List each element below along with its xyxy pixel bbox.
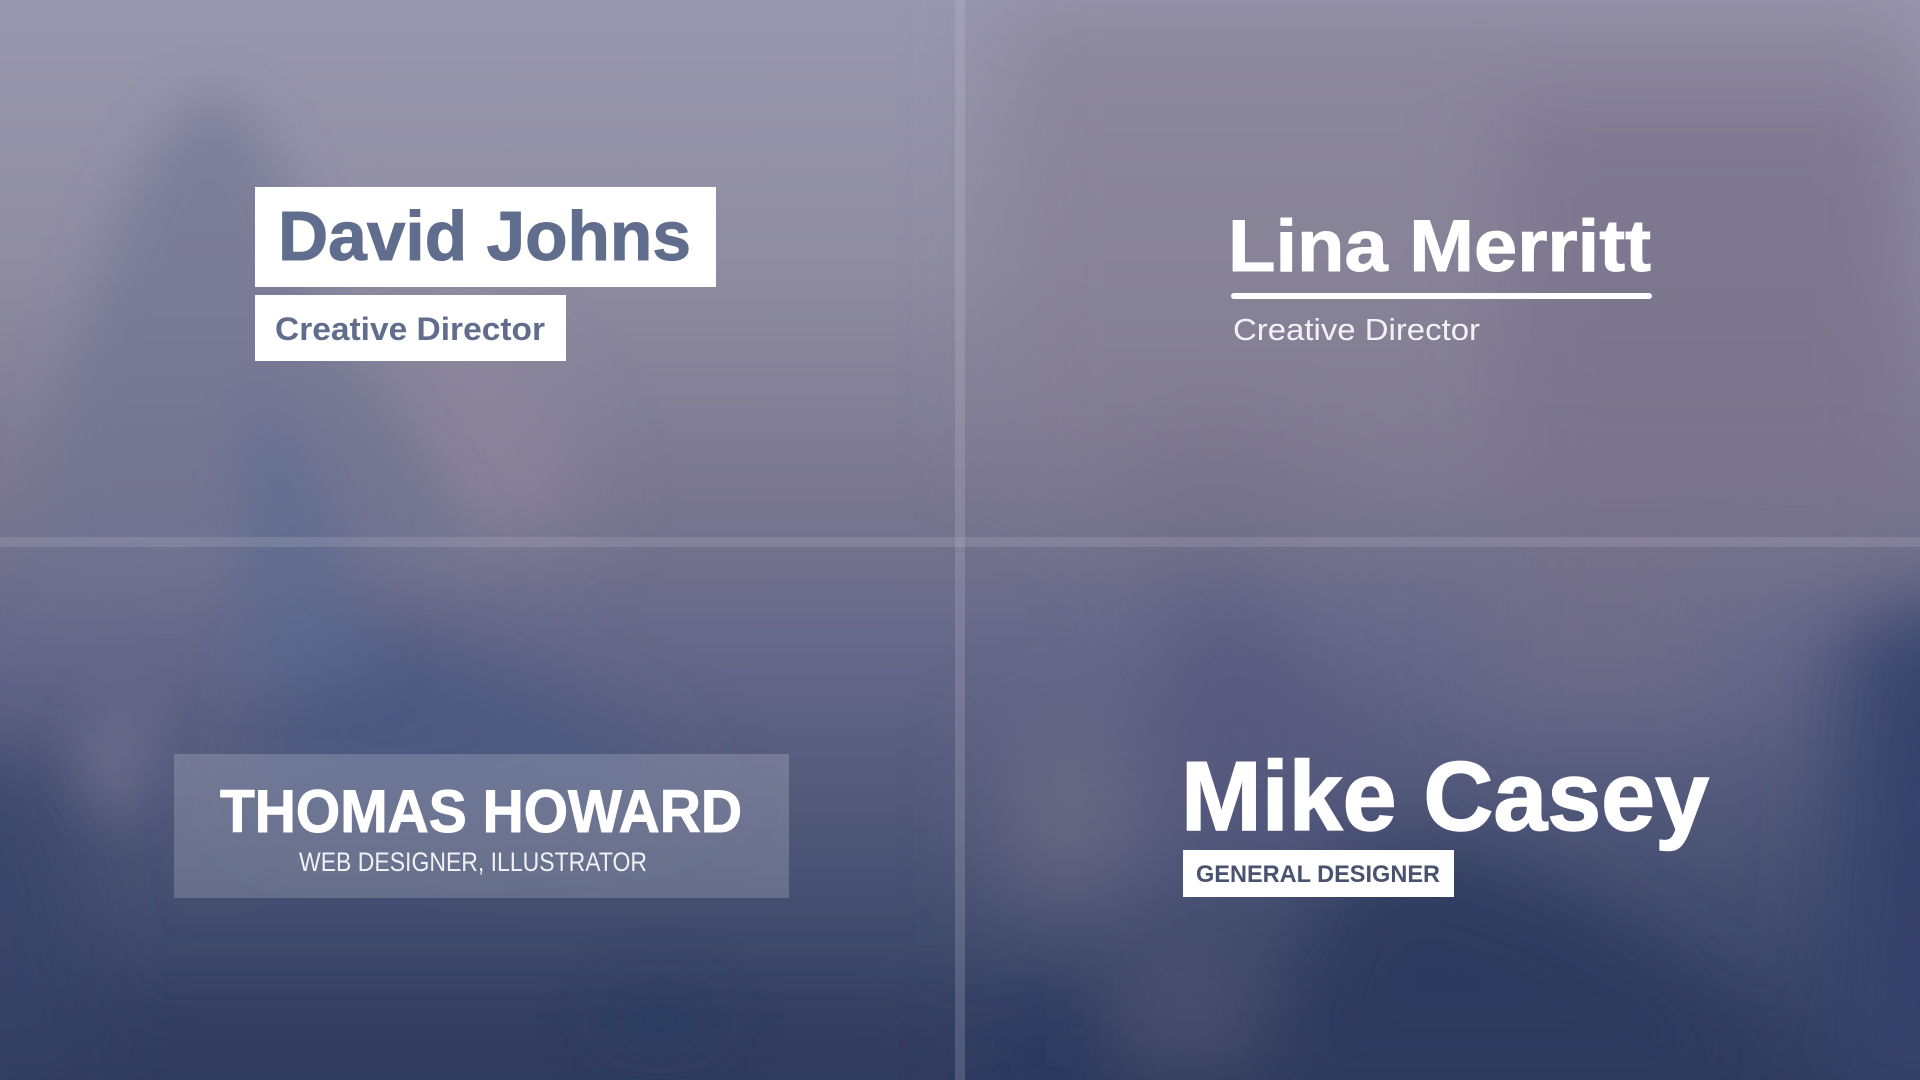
underline bbox=[1231, 293, 1652, 299]
name: Mike Casey bbox=[1181, 741, 1709, 851]
role box bbox=[1183, 850, 1454, 897]
name box: David Johns bbox=[278, 197, 691, 275]
panel: Lina Merritt title bbox=[1228, 206, 1652, 347]
vertical divider bbox=[955, 0, 965, 1080]
role: Creative Director bbox=[1233, 312, 1480, 347]
panel: David Johns title bbox=[255, 187, 716, 361]
name: THOMAS HOWARD bbox=[220, 778, 742, 845]
translucent box bbox=[174, 754, 789, 898]
role box: Creative Director bbox=[275, 311, 545, 347]
panel: Thomas Howard title bbox=[174, 754, 789, 898]
panel: Mike Casey title bbox=[1181, 741, 1709, 897]
name: Lina Merritt bbox=[1228, 206, 1651, 287]
role box: GENERAL DESIGNER bbox=[1196, 861, 1440, 888]
role: WEB DESIGNER, ILLUSTRATOR bbox=[299, 847, 647, 877]
role box bbox=[255, 295, 566, 361]
horizontal divider bbox=[0, 537, 1920, 547]
